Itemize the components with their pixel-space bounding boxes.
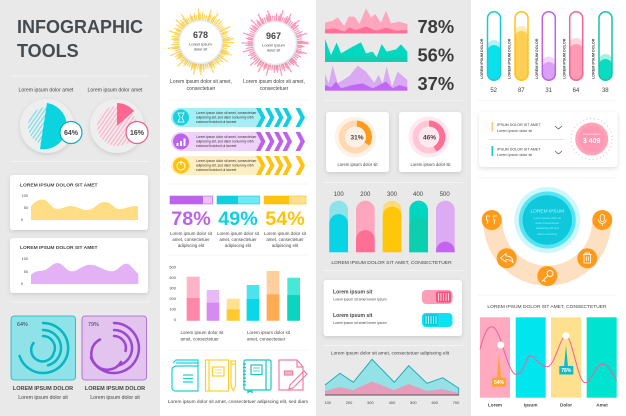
tube gauge: 87 [508,12,528,94]
title: TOOLS [17,41,79,61]
panel: list and counter: IPSUM DOLOR SIT AMET [497,148,541,152]
panel: purple area chart: LOREM IPSUM DOLOR SIT AMET [20,245,98,251]
panel: donut 31% [326,112,389,172]
tube gauge: 87: LOREM IPSUM DOLOR [508,38,512,79]
line chart with columns: Amet [596,402,608,408]
icon: quotes [482,210,502,230]
stat: 54% yellow: adipiscing elit [272,243,299,248]
bar chart: 300 [169,286,177,290]
pie chart: 64% [19,88,82,153]
arrow row: cyan: euismod tincidunt ut laoreet [196,120,236,124]
pill bar chart: 400 [413,192,424,198]
bar chart captions [180,330,291,342]
line chart with columns: Ipsum [524,402,537,408]
pill bar chart: 500 [440,192,450,198]
arrow row: yellow [171,156,305,175]
area chart: 100 [324,400,332,405]
semicircle menu [482,187,612,286]
tube gauge: 52: LOREM IPSUM DOLOR [480,38,484,79]
panel: yellow area chart: LOREM IPSUM DOLOR SIT AMET [20,182,98,188]
stat: 49% cyan: adipiscing elit [225,243,252,248]
icon: document and pen [279,360,307,390]
radial burst: 967: dolor sit [267,48,281,52]
caption: burst 678 [170,79,232,92]
panel: donut 46%: 46% [423,134,436,142]
arrow row: purple: Lorem ipsum dolor sit amet, consectetuer [196,135,257,139]
sparkline: 78%: 78% [418,16,454,37]
area chart: 200 [346,400,353,405]
area chart: 600 [431,400,439,405]
panel: list and counter: IPSUM DOLOR SIT AMET [497,123,541,127]
pie chart: 64%: Lorem ipsum dolor amet [19,88,74,94]
bar chart: 200 [169,296,177,301]
radial chart: teal 64% [11,316,76,401]
radial burst: 678: 678 [193,30,208,40]
arrow row: purple [171,132,305,151]
tube gauge: 64 [562,12,583,94]
line chart with columns: LOREM IPSUM DOLOR SIT AMET, CONSECTETUER [487,304,607,310]
line chart with columns: Lorem [488,402,502,408]
pie chart: 16% [88,88,148,153]
caption: burst 678: Lorem ipsum dolor sit amet, [170,79,232,85]
panel: yellow area chart: 50 [24,206,28,210]
tube gauge: 31: LOREM IPSUM DOLOR [535,38,539,79]
pill bar chart: 100 [334,192,344,198]
stat: 78% purple: Lorem ipsum dolor sit [170,231,213,236]
radial chart: teal 64%: Lorem ipsum dolor sit [18,395,68,401]
arrow row: cyan: Lorem ipsum dolor sit amet, consectetuer [196,111,257,115]
panel: yellow area chart [10,175,148,230]
counter: 3 409 [571,118,612,160]
panel: donut 46%: Lorem ipsum dolor sit [410,162,451,167]
line chart with columns: Dolor [560,402,572,408]
stat: 54% yellow: 54% [265,208,305,230]
counter: 3 409: Lorem ipsum [583,132,601,136]
tube gauge: 38: LOREM IPSUM DOLOR [592,38,596,79]
stat: 54% yellow [264,196,307,248]
center circle: Lorem ipsum dolor sit [533,216,561,220]
stat: 78% purple: amet, consectetuer [172,237,210,242]
icon: key [537,266,557,286]
pill bar chart: 200 [360,192,371,198]
radial burst: 967: 967 [266,31,281,41]
pill bar chart: 300 [387,192,398,198]
panel: toggles: Lorem ipsum sit amet lorem ipsum [333,321,387,325]
panel: list and counter: Lorem ipsum dolor sit [497,129,532,133]
icon: trash [577,248,597,268]
tube gauge: 38 [592,12,612,94]
stat: 78% purple: 78% [171,208,211,230]
sparkline: 37%: 37% [418,73,454,94]
panel: toggles: Lorem ipsum sit [333,290,373,296]
arrow row: yellow: adipiscing elit, sed diam nonummy nibh [196,164,254,168]
tube gauge: 52: 52 [490,88,498,94]
icon: book [172,360,198,391]
panel: toggles [324,280,462,336]
pie chart: 16%: 16% [130,130,145,137]
center circle [514,187,580,253]
radial chart: teal 64%: 64% [17,322,28,328]
center circle: adipiscing elit sed [536,226,559,230]
icon: notebook and pencil [206,360,236,391]
sparkline: 78% [325,8,454,37]
title [17,17,143,61]
radial burst: 967 [249,17,301,69]
panel: list and counter: Lorem ipsum dolor sit [497,153,532,157]
area chart: 300 [367,400,374,405]
arrow row: cyan: adipiscing elit, sed diam nonummy nibh [196,116,254,120]
radial chart: purple 79% [82,316,146,401]
sparkline: 37% [325,66,454,94]
stat: 78% purple: adipiscing elit [178,243,205,248]
radial chart: purple 79%: 79% [88,322,99,328]
caption: burst 967: consectetuer [260,86,289,92]
icon: microphone [592,210,612,230]
radial chart: teal 64%: LOREM IPSUM DOLOR [13,386,73,392]
center circle: LOREM IPSUM [531,208,564,214]
stat: 49% cyan [217,196,260,248]
radial chart: purple 79%: LOREM IPSUM DOLOR [85,386,145,392]
pill bar chart: LOREM IPSUM DOLOR SIT AMET, CONSECTETUER [331,260,452,266]
caption: burst 678: consectetuer [187,86,216,92]
area chart: 500 [410,400,417,405]
radial burst: 967: Lorem ipsum [262,42,285,48]
arrow row: yellow: Lorem ipsum dolor sit amet, consectetuer [196,159,257,163]
bar chart [169,264,300,322]
radial burst: 678 [175,16,227,68]
radial burst: 678: Lorem ipsum [189,42,212,46]
stat: 54% yellow: Lorem ipsum dolor sit [264,231,307,236]
bar chart: 400 [169,275,177,280]
title: INFOGRAPHIC [17,17,143,37]
bar chart captions: Lorem ipsum dolor sit [180,330,224,335]
panel: purple area chart: 0 [21,282,23,286]
bar chart captions: amet, consectetuer [180,336,219,342]
caption: icons: Lorem ipsum dolor sit amet, consectetuer adipiscing elit, sed diam [168,399,308,405]
line chart with columns [480,304,617,408]
stat: 49% cyan: Lorem ipsum dolor sit [217,231,260,236]
stat: 49% cyan: 49% [218,208,258,230]
sparkline: 56%: 56% [418,44,454,66]
bar chart captions: amet, consectetuer [247,336,286,342]
icon: reply arrow [497,248,517,268]
panel: donut 31%: Lorem ipsum dolor sit [337,162,378,167]
center circle: amet consectetuer [535,221,559,225]
pie chart: 16%: Lorem ipsum dolor amet [88,88,143,94]
radial chart: purple 79%: Lorem ipsum dolor sit [90,395,140,401]
panel: toggles: Lorem ipsum sit amet lorem ipsum [333,298,387,302]
stat: 78% purple [170,196,213,248]
panel: donut 31%: 31% [350,134,364,142]
caption: burst 967 [243,79,305,92]
tube gauge: 87: 87 [518,88,525,94]
center circle: diam nonummy [537,232,558,236]
callout: 78%: 78% [561,368,572,374]
tube gauge: 64: LOREM IPSUM DOLOR [562,38,566,79]
icon: spiral notebook [243,360,271,392]
arrow row: yellow: euismod tincidunt ut laoreet [196,168,236,172]
tube gauge: 64: 64 [573,88,580,94]
panel: yellow area chart: 100 [22,194,28,198]
arrow row: purple: euismod tincidunt ut laoreet [196,144,236,148]
radial burst: 678: dolor sit [194,46,208,52]
pill bar chart [329,192,455,266]
panel: purple area chart [10,238,148,293]
toggle: pink [422,290,452,304]
panel: purple area chart: 100 [22,257,28,261]
callout: 54%: 54% [494,380,505,386]
arrow row: purple: adipiscing elit, sed diam nonummy nibh [196,140,254,144]
bar chart captions: Lorem ipsum dolor sit [247,330,291,335]
area chart [324,350,460,405]
bar chart: 100 [169,306,177,312]
area chart: 700 [453,400,460,405]
panel: toggles: Lorem ipsum sit [333,313,373,319]
panel: purple area chart: 50 [24,270,28,274]
area chart: 400 [389,400,396,405]
panel: yellow area chart: 0 [21,218,23,222]
stat: 49% cyan: amet, consectetuer [219,237,257,242]
stat: 54% yellow: amet, consectetuer [266,237,304,242]
pie chart: 64%: 64% [64,130,79,137]
tube gauge: 31 [535,12,555,94]
caption: burst 967: Lorem ipsum dolor sit amet, [243,79,305,85]
sparkline: 56% [325,39,454,66]
tube gauge: 31: 31 [545,88,553,94]
area chart: Lorem ipsum dolor sit amet, consectetuer adipiscing elit [331,350,450,356]
counter: 3 409: 3 409 [583,138,601,145]
arrow row: cyan [171,108,305,127]
tube gauge: 38: 38 [602,88,609,94]
bar chart: 0 [174,317,177,322]
panel: donut 46% [399,112,462,172]
tube gauge: 52 [480,12,500,94]
bar chart: 500 [169,264,177,270]
toggle: cyan [422,313,452,327]
panel: list and counter [479,112,618,167]
